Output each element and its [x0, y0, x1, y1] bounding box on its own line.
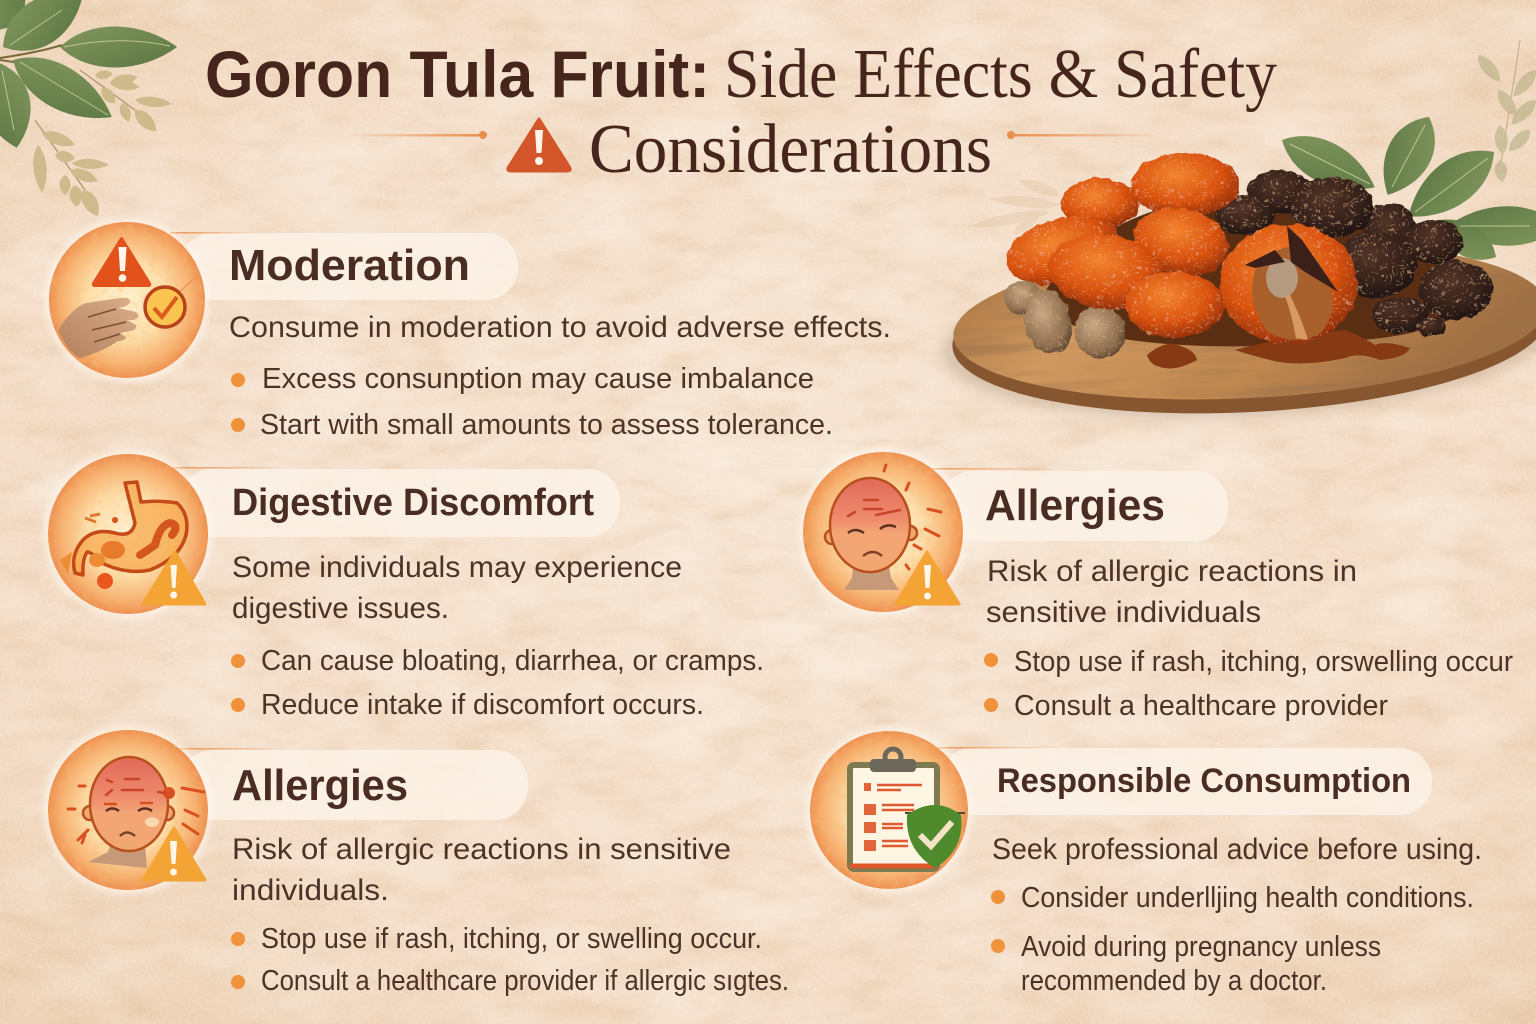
title: Side Effects & Safety [724, 36, 1277, 113]
plate leaves [1273, 107, 1536, 271]
top-left leaves [0, 0, 177, 220]
icon: irritated face with warning [43, 725, 213, 895]
bullet list [991, 882, 1474, 997]
panel: digestive discomfort [43, 449, 764, 721]
heading: Allergies [232, 761, 408, 810]
bullet list: Can cause bloating, diarrhea, or cramps. [261, 645, 764, 677]
bullet list [231, 923, 789, 997]
bullet list: recommended by a doctor. [1021, 965, 1327, 997]
title: Goron Tula Fruit: [205, 37, 710, 111]
description: Some individuals may experience [232, 551, 682, 584]
description: sensitive individuals [986, 596, 1261, 629]
bullet list [231, 363, 833, 441]
icon: stomach with warning [43, 449, 213, 619]
faint fronds left of the plate [970, 174, 1062, 239]
fruit pile shadow [1040, 195, 1480, 346]
heading: Responsible Consumption [997, 762, 1411, 800]
description: digestive issues. [232, 592, 449, 625]
syrup [1147, 330, 1410, 368]
illustration: plate of goron tula fruit [938, 107, 1536, 432]
description: Risk of allergic reactions in sensitive [232, 833, 731, 866]
description: Risk of allergic reactions in [987, 555, 1357, 588]
opened fruit flesh [1245, 226, 1338, 340]
icon: irritated face with warning [798, 447, 968, 617]
description: Seek professional advice before using. [992, 833, 1482, 866]
bullet list: Start with small amounts to assess tolerance. [260, 409, 833, 441]
title [205, 36, 1277, 188]
dark dried fruit [1214, 170, 1493, 337]
description [232, 551, 682, 625]
description: individuals. [232, 874, 389, 907]
panel: responsible consumption [805, 726, 1482, 997]
heading pill [180, 750, 528, 820]
panel: allergies (right) [798, 447, 1513, 722]
icon: title warning triangle [508, 119, 570, 171]
bullet list: Stop use if rash, itching, orswelling occur [1014, 646, 1513, 678]
panel: allergies (left) [43, 725, 789, 997]
orange dried fruit [999, 153, 1358, 344]
heading pill [940, 471, 1228, 541]
description [986, 555, 1357, 629]
bullet list: Consult a healthcare provider [1014, 690, 1388, 722]
wooden plate [938, 229, 1536, 432]
bullet list: Reduce intake if discomfort occurs. [261, 689, 704, 721]
top-right faint sprig [1473, 40, 1536, 182]
bullet list: Stop use if rash, itching, or swelling occur. [261, 923, 762, 955]
description: Consume in moderation to avoid adverse effects. [229, 311, 891, 344]
heading: Digestive Discomfort [232, 482, 594, 524]
nuts [1004, 281, 1131, 365]
heading pill [180, 233, 518, 300]
heading pill [180, 469, 620, 537]
icon: clipboard with check shield [805, 726, 973, 894]
bullet list [231, 645, 764, 721]
panel: moderation [44, 217, 891, 441]
bullet list: Avoid during pregnancy unless [1021, 931, 1381, 963]
bullet list: Consult a healthcare provider if allergic sıgtes. [261, 965, 789, 997]
description [232, 833, 731, 907]
bullet list [984, 646, 1513, 722]
heading pill [940, 748, 1432, 815]
heading: Moderation [229, 241, 470, 290]
heading: Allergies [985, 481, 1165, 530]
bullet list: Excess consunption may cause imbalance [262, 363, 814, 395]
icon: hand with warning and check [44, 217, 210, 383]
title: Considerations [589, 111, 992, 188]
bullet list: Consider underlljing health conditions. [1021, 882, 1474, 914]
